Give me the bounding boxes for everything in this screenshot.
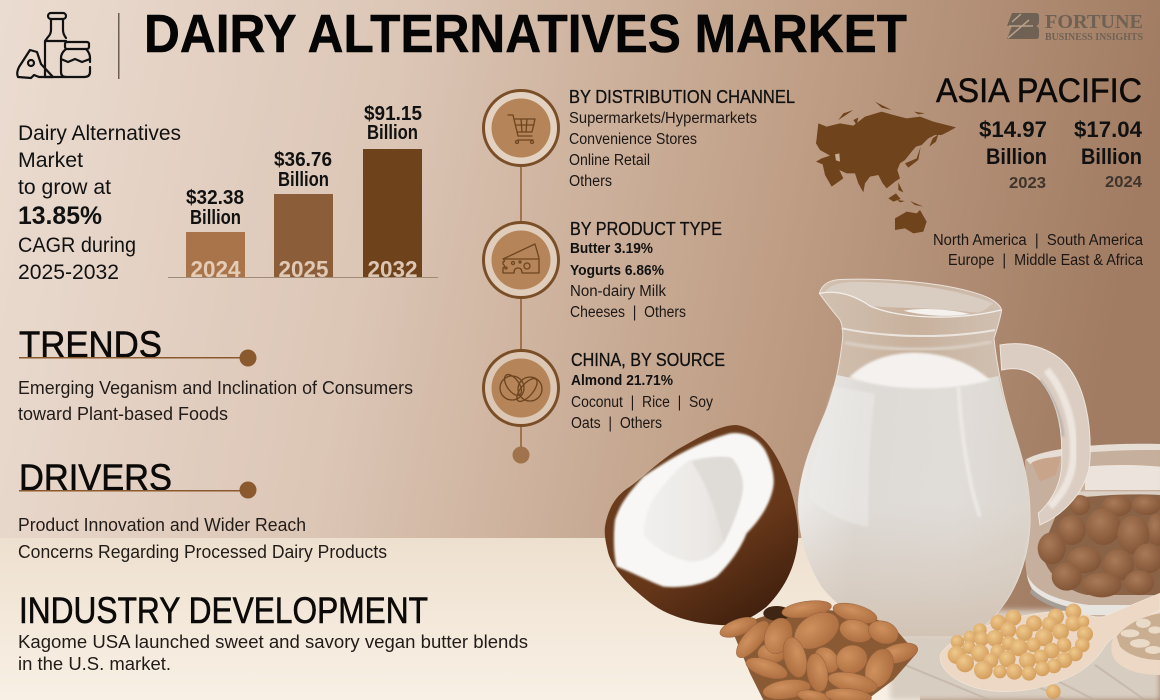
panel: drivers: DRIVERS: [19, 457, 172, 498]
panel: trends: toward Plant-based Foods: [18, 404, 228, 424]
bar 2024: 2024: [190, 256, 241, 282]
bar 2024: [186, 187, 245, 282]
panel: industry development: INDUSTRY DEVELOPMENT: [19, 590, 428, 631]
bar 2025: 2025: [278, 256, 329, 282]
bar 2032: [363, 103, 422, 282]
illustration: milk jug: [798, 279, 1090, 637]
panel: by product type: [484, 219, 722, 321]
jug handle: [1000, 344, 1090, 525]
icon: dairy products: [17, 13, 90, 78]
timeline connector: [512, 165, 530, 464]
panel: china by source: Oats | Others: [571, 415, 662, 432]
illustration: glass jar of hazelnuts: [1025, 444, 1160, 617]
panel: asia pacific values: $17.04: [1074, 117, 1143, 142]
bar 2025: $36.76: [274, 149, 332, 171]
logo: Fortune Business Insights: FORTUNE: [1045, 11, 1143, 33]
panel: trends: [18, 324, 413, 424]
text block: market growth summary: Market: [18, 149, 83, 172]
panel: trends: TRENDS: [19, 324, 162, 365]
illustration: almonds: [717, 598, 920, 700]
panel: trends: Emerging Veganism and Inclination of Consumers: [18, 378, 413, 398]
bar chart: market size: [168, 103, 438, 282]
logo: Fortune Business Insights: BUSINESS INSIGHTS: [1045, 32, 1143, 43]
panel: asia pacific values: [936, 72, 1143, 192]
panel: industry development: in the U.S. market.: [18, 654, 171, 674]
jug rim: [819, 282, 1001, 349]
map: Asia Pacific: [816, 102, 956, 233]
header divider: [118, 13, 120, 79]
text block: other regions: North America | South America: [933, 232, 1143, 249]
glass body: [798, 279, 1030, 637]
illustration: spoon of soybeans: [940, 593, 1160, 699]
panel: by distribution channel: [484, 87, 795, 190]
text block: market growth summary: Dairy Alternatives: [18, 122, 181, 145]
bar 2032: 2032: [368, 256, 418, 282]
panel: china by source: Almond 21.71%: [571, 373, 673, 389]
panel: by distribution channel: BY DISTRIBUTION CHANNEL: [569, 87, 795, 107]
text block: market growth summary: 2025-2032: [18, 261, 119, 284]
panel: by product type: Cheeses | Others: [570, 304, 686, 321]
panel: by distribution channel: Others: [569, 173, 612, 190]
text block: other regions: [933, 232, 1143, 269]
panel: asia pacific values: Billion: [1081, 144, 1142, 169]
panel: drivers: Product Innovation and Wider Reach: [18, 515, 306, 535]
bar 2024: Billion: [190, 207, 241, 229]
panel: asia pacific values: ASIA PACIFIC: [936, 72, 1142, 110]
bar 2032: Billion: [367, 122, 418, 144]
panel: by distribution channel: Supermarkets/Hypermarkets: [569, 110, 757, 127]
panel: drivers: [18, 457, 387, 562]
title: DAIRY ALTERNATIVES MARKET: [144, 4, 907, 64]
panel: asia pacific values: Billion: [986, 144, 1047, 169]
bar 2025: [274, 149, 333, 282]
milk: [798, 353, 1030, 637]
panel: china by source: CHINA, BY SOURCE: [571, 350, 725, 370]
panel: drivers: Concerns Regarding Processed Dairy Products: [18, 542, 387, 562]
icon: almonds: [484, 350, 558, 426]
text block: market growth summary: CAGR during: [18, 234, 136, 257]
text block: market growth summary: 13.85%: [18, 202, 102, 230]
panel: industry development: [18, 590, 528, 674]
panel: by product type: Butter 3.19%: [570, 241, 653, 257]
panel: asia pacific values: 2023: [1009, 175, 1046, 192]
bar 2032: $91.15: [364, 103, 422, 125]
illustration: spoon of oats: [1111, 612, 1160, 675]
logo: Fortune Business Insights: [1007, 11, 1143, 43]
panel: industry development: Kagome USA launched sweet and savory vegan butter blends: [18, 632, 528, 652]
icon: shopping cart: [484, 90, 558, 166]
panel: china by source: [484, 350, 725, 432]
panel: asia pacific values: $14.97: [979, 117, 1047, 142]
illustration: coconut: [605, 425, 798, 625]
panel: asia pacific values: 2024: [1105, 174, 1142, 191]
panel: china by source: Coconut | Rice | Soy: [571, 394, 713, 411]
text block: market growth summary: to grow at: [18, 176, 111, 199]
panel: by product type: BY PRODUCT TYPE: [570, 219, 722, 239]
panel: by product type: Non-dairy Milk: [570, 283, 666, 300]
panel: by distribution channel: Online Retail: [569, 152, 650, 169]
panel: by product type: Yogurts 6.86%: [570, 263, 664, 279]
bar 2024: $32.38: [186, 187, 244, 209]
icon: cheese: [484, 222, 558, 298]
text block: other regions: Europe | Middle East & Africa: [948, 252, 1143, 269]
panel: by distribution channel: Convenience Stores: [569, 131, 697, 148]
text block: market growth summary: [18, 122, 181, 284]
bar 2025: Billion: [278, 169, 329, 191]
